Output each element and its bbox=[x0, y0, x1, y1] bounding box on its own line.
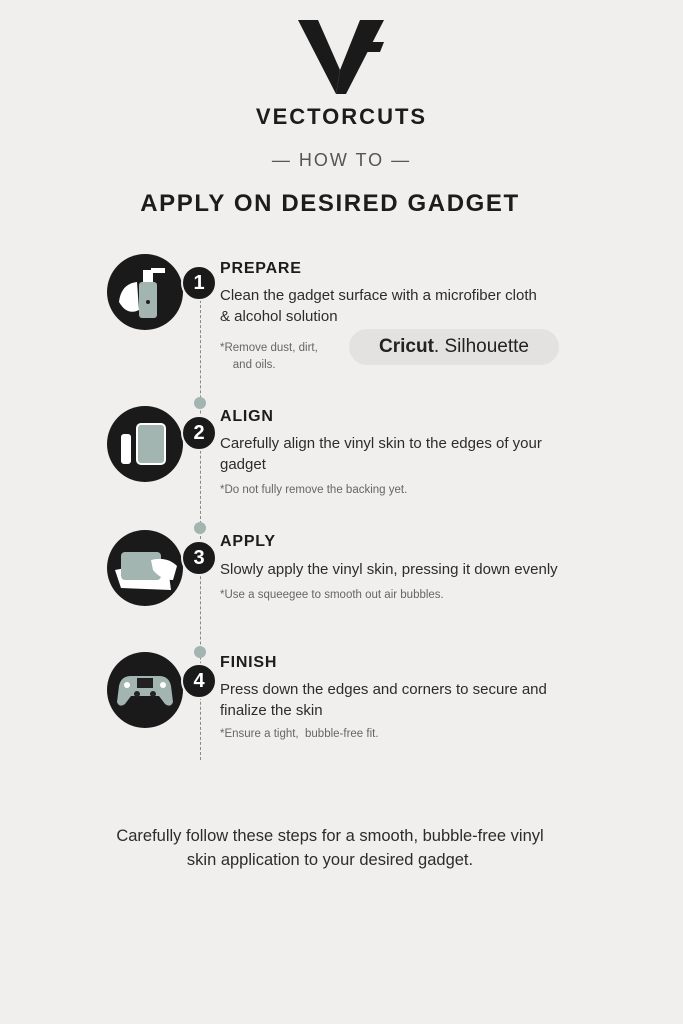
description bbox=[220, 435, 542, 473]
step 4 bbox=[107, 646, 547, 740]
badge 4: 4 bbox=[193, 670, 205, 692]
description: finalize the skin bbox=[220, 702, 323, 719]
note: *Ensure a tight, bubble-free fit. bbox=[220, 728, 379, 740]
dot bbox=[194, 397, 206, 409]
badge 1 bbox=[181, 265, 217, 301]
icon: spray bottle and cloth bbox=[107, 254, 183, 330]
step title: FINISH bbox=[220, 654, 277, 671]
step title: PREPARE bbox=[220, 260, 302, 277]
badge 3: 3 bbox=[193, 547, 205, 569]
icon: game controller bbox=[107, 652, 183, 728]
badge 4 bbox=[181, 663, 217, 699]
badge 3 bbox=[181, 540, 217, 576]
description: Clean the gadget surface with a microfiber cloth bbox=[220, 287, 537, 304]
icon: phone and remote bbox=[107, 406, 183, 482]
subheading: — HOW TO — bbox=[272, 150, 411, 170]
note: *Use a squeegee to smooth out air bubbles. bbox=[220, 589, 444, 601]
timeline dashed line bbox=[200, 300, 201, 760]
description: Slowly apply the vinyl skin, pressing it down evenly bbox=[220, 561, 558, 578]
note: *Remove dust, dirt, bbox=[220, 342, 318, 354]
note: and oils. bbox=[233, 359, 276, 371]
footer text: Carefully follow these steps for a smooth, bubble-free vinyl bbox=[116, 827, 544, 845]
description: Carefully align the vinyl skin to the edges of your bbox=[220, 435, 542, 452]
footer text: skin application to your desired gadget. bbox=[187, 851, 473, 869]
dot bbox=[194, 522, 206, 534]
description bbox=[220, 287, 537, 325]
step 2 bbox=[107, 397, 542, 496]
step 1 bbox=[107, 254, 559, 371]
icon: hand applying skin bbox=[107, 530, 183, 606]
brand pill: Cricut. Silhouette bbox=[379, 336, 529, 357]
dot bbox=[194, 646, 206, 658]
logo mark bbox=[298, 20, 384, 94]
description bbox=[220, 681, 547, 719]
description: & alcohol solution bbox=[220, 308, 338, 325]
badge 1: 1 bbox=[193, 272, 205, 294]
footer text bbox=[116, 827, 544, 869]
badge 2: 2 bbox=[193, 422, 205, 444]
badge 2 bbox=[181, 415, 217, 451]
description: Press down the edges and corners to secure and bbox=[220, 681, 547, 698]
brand name: VECTORCUTS bbox=[256, 104, 427, 129]
description: gadget bbox=[220, 456, 266, 473]
step 3 bbox=[107, 522, 558, 606]
note bbox=[220, 342, 318, 371]
brand pill bbox=[349, 329, 559, 365]
note: *Do not fully remove the backing yet. bbox=[220, 484, 407, 496]
step title: ALIGN bbox=[220, 408, 274, 425]
step title: APPLY bbox=[220, 533, 276, 550]
title: APPLY ON DESIRED GADGET bbox=[140, 190, 520, 217]
